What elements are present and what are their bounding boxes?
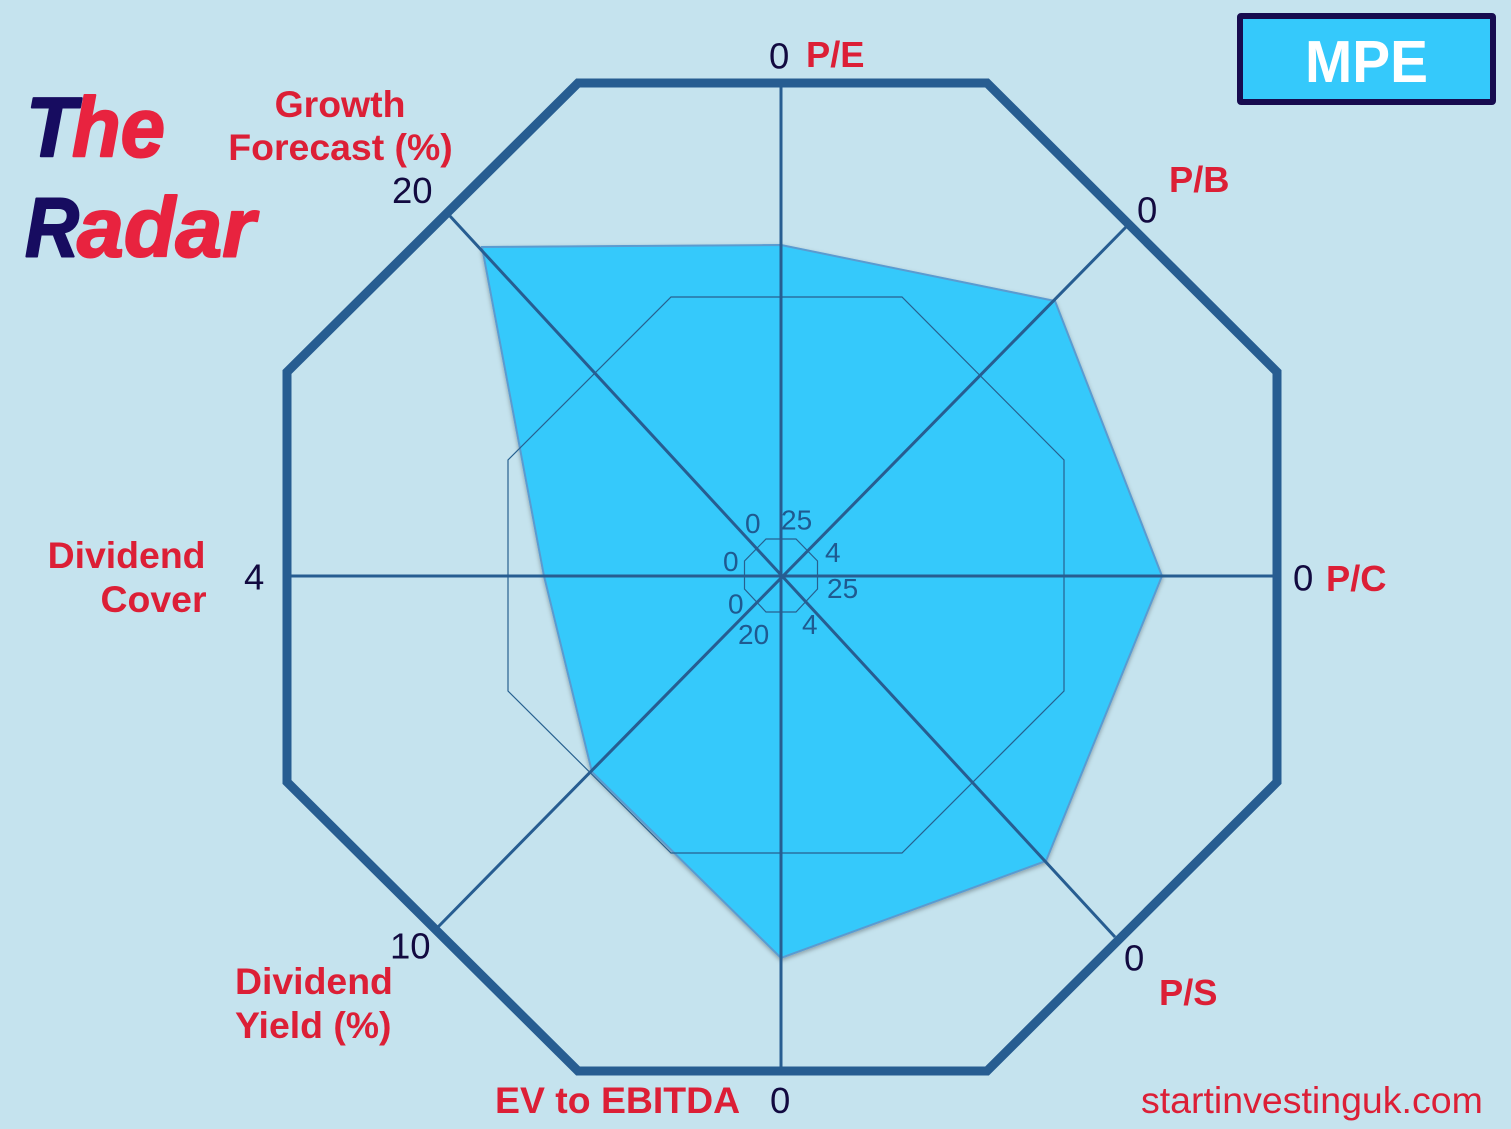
axis label: Dividend Cover: Dividend [48, 534, 206, 576]
axis label: Dividend Cover [48, 534, 206, 620]
outer scale values: 10 [390, 926, 431, 966]
outer scale values: 20 [392, 170, 433, 211]
axis label: Dividend Yield: Dividend [235, 960, 393, 1002]
title: he [72, 80, 165, 174]
axis label: Growth Forecast [228, 83, 453, 168]
inner scale values: 0 [745, 508, 761, 539]
title: adar [77, 180, 259, 274]
outer scale values: 0 [1137, 190, 1157, 230]
inner scale values: 0 [723, 546, 739, 577]
MPE ticker badge: MPE [1305, 29, 1428, 95]
axis label: Growth Forecast: Growth [275, 83, 405, 125]
axis label: P/S: P/S [1159, 972, 1218, 1013]
axis label: P/C: P/C [1326, 558, 1387, 599]
axis label: Dividend Yield: Yield (%) [235, 1004, 392, 1046]
inner scale values [723, 504, 858, 650]
axis label: Dividend Yield [235, 960, 393, 1046]
inner reference octagon [744, 539, 818, 612]
axis label: Dividend Cover: Cover [101, 578, 206, 620]
inner scale values: 25 [827, 573, 858, 604]
inner scale values: 0 [728, 588, 744, 620]
outer scale values: 0 [1293, 558, 1313, 598]
outer scale values: 4 [244, 556, 264, 598]
title [25, 80, 259, 274]
outer scale values: 0 [769, 36, 789, 76]
inner scale values: 20 [738, 619, 769, 650]
MPE ticker badge [1240, 16, 1493, 102]
axis label: Growth Forecast: Forecast (%) [228, 126, 453, 168]
outer scale values: 0 [1124, 938, 1144, 978]
outer scale values: 0 [770, 1080, 790, 1121]
axis spokes [287, 83, 1277, 1071]
inner scale values: 4 [802, 609, 818, 640]
axis label: P/B: P/B [1169, 159, 1230, 200]
website credit: startinvestinguk.com [1141, 1079, 1483, 1121]
axis label: EV to EBITDA: EV to EBITDA [495, 1079, 740, 1121]
inner scale values: 4 [825, 537, 841, 568]
outer scale values [244, 36, 1313, 1121]
outer octagon [287, 83, 1277, 1071]
data polygon [482, 245, 1162, 958]
axis label: P/E: P/E [806, 34, 865, 75]
inner scale values: 25 [781, 504, 812, 536]
title: R [25, 180, 79, 274]
middle reference octagon [508, 297, 1064, 853]
title: T [26, 80, 83, 174]
